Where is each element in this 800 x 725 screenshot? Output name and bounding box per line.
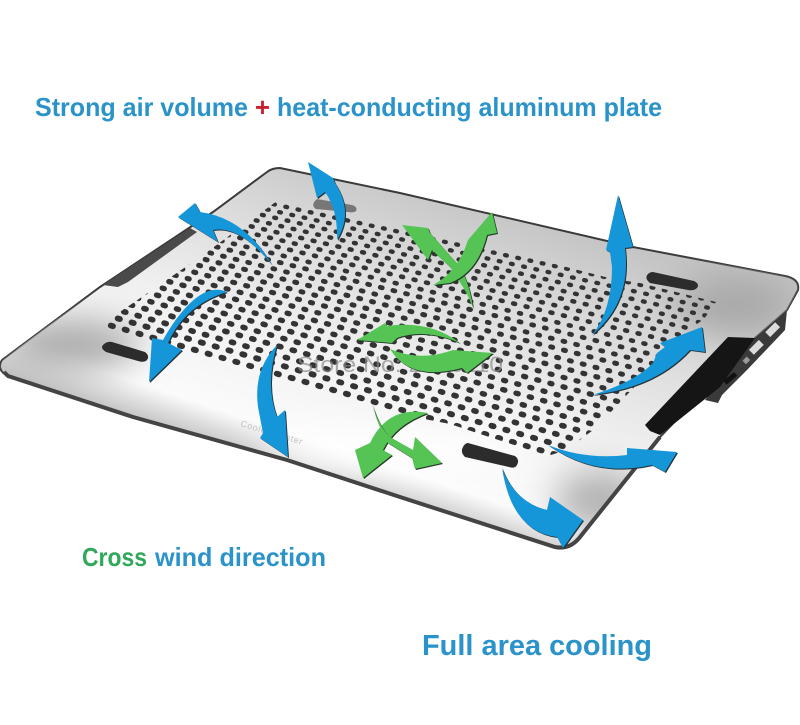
title xyxy=(35,92,662,122)
arrow: green lower right xyxy=(372,403,442,469)
arrow: blue front right xyxy=(502,468,583,548)
cooling pad xyxy=(0,164,798,548)
caption: cross wind direction: Cross xyxy=(82,542,147,572)
caption: cross wind direction: wind direction xyxy=(154,542,326,572)
arrow: blue rear left xyxy=(178,203,272,265)
left rear notch xyxy=(103,228,197,287)
rubber pad: left xyxy=(102,342,148,362)
arrow: blue left xyxy=(149,290,227,382)
caption: full area cooling: Full area cooling xyxy=(422,630,652,662)
ventilation holes xyxy=(108,202,716,456)
rubber pad: back xyxy=(313,199,356,212)
arrow: green lower left xyxy=(355,412,428,478)
watermark: Store No: 2956110 xyxy=(297,352,503,377)
right side slot xyxy=(645,337,755,435)
USB port block xyxy=(705,310,787,403)
arrow: green centre right xyxy=(390,349,493,373)
title: Strong air volume xyxy=(35,92,248,122)
arrow: green up left xyxy=(402,225,473,308)
arrow: green centre left xyxy=(357,323,460,343)
arrow: blue front left xyxy=(257,345,288,457)
title: + xyxy=(255,92,270,122)
arrow: green up right xyxy=(433,212,497,285)
aluminium plate xyxy=(0,168,798,548)
brand mark: Cooler Master xyxy=(239,418,304,447)
arrow: blue back xyxy=(308,162,345,240)
caption: cross wind direction xyxy=(82,542,326,572)
arrow: blue lower right xyxy=(548,445,677,472)
rubber pad: right xyxy=(646,272,698,290)
arrow: blue upper right xyxy=(592,195,633,335)
arrow: blue right xyxy=(592,327,705,395)
title: heat-conducting aluminum plate xyxy=(277,92,662,122)
rubber pad: front xyxy=(462,443,518,468)
front edge xyxy=(4,372,660,548)
